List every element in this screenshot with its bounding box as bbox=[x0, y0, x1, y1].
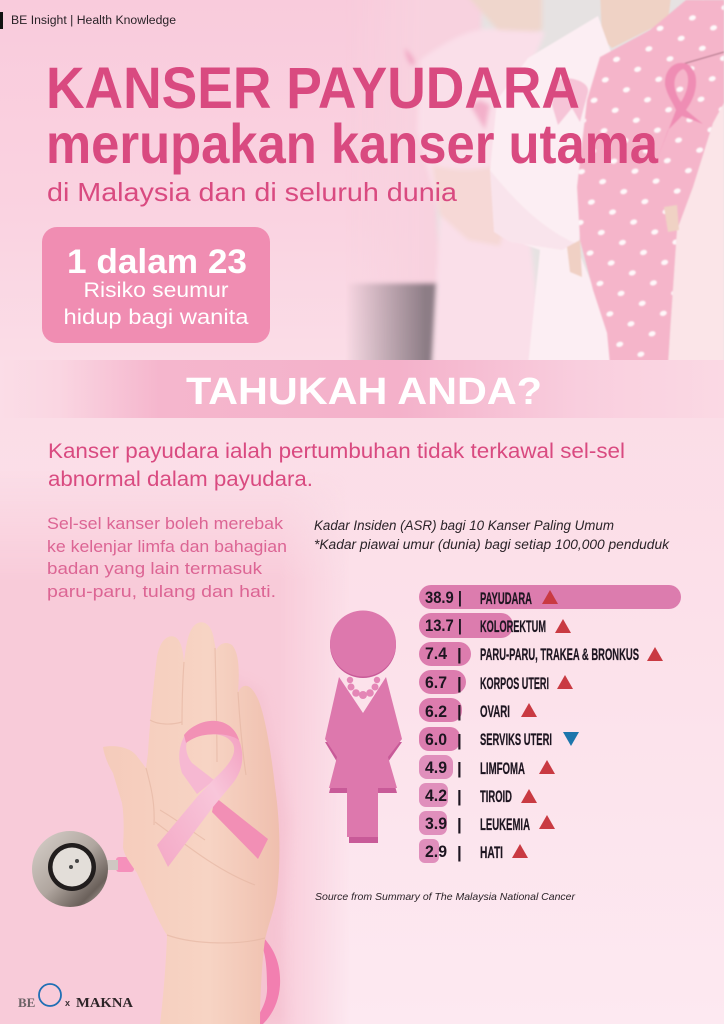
bar: Kolorektum 13.7: KOLOREKTUM bbox=[480, 617, 546, 636]
bar: Ovari 6.2: OVARI bbox=[480, 702, 510, 721]
bar: Paru-paru 7.4 bbox=[419, 642, 663, 666]
chart heading: *Kadar piawai umur (dunia) bagi setiap 100,000 penduduk bbox=[314, 537, 670, 552]
spread text: paru-paru, tulang dan hati. bbox=[47, 583, 276, 601]
woman 4 polka shirt bbox=[577, 0, 724, 365]
bar: Payudara 38.9: 38.9 | bbox=[425, 588, 462, 607]
chart heading: Kadar Insiden (ASR) bagi 10 Kanser Paling Umum bbox=[314, 518, 614, 533]
spread text: ke kelenjar limfa dan bahagian bbox=[47, 538, 287, 556]
bar: Korpos uteri 6.7: | bbox=[457, 674, 462, 693]
chart: incidence bars bbox=[419, 585, 681, 863]
bar: Payudara 38.9 bbox=[419, 585, 681, 609]
spread text bbox=[47, 515, 287, 601]
bar: Hati 2.9: HATI bbox=[480, 843, 503, 862]
photo: hand with ribbon and stethoscope bbox=[0, 514, 330, 1024]
spread text: Sel-sel kanser boleh merebak bbox=[47, 515, 284, 533]
bar: Leukemia 3.9: LEUKEMIA bbox=[480, 815, 530, 834]
bar: Leukemia 3.9 bbox=[419, 811, 555, 835]
stethoscope head bbox=[32, 831, 134, 907]
bar: Tiroid 4.2: TIROID bbox=[480, 787, 512, 806]
bar: Limfoma 4.9: 4.9 bbox=[425, 758, 447, 777]
callout: 1 in 23: 1 dalam 23 bbox=[67, 243, 247, 281]
necklace bbox=[347, 677, 380, 699]
callout: 1 in 23: Risiko seumur bbox=[84, 279, 228, 302]
bar: Limfoma 4.9: | bbox=[457, 759, 462, 778]
bar: Leukemia 3.9: 3.9 bbox=[425, 814, 447, 833]
header tag: BE Insight | Health Knowledge bbox=[11, 15, 176, 27]
woman 3 bbox=[600, 0, 672, 48]
logos: BE x MAKNA bbox=[18, 984, 134, 1011]
banner: Tahukah Anda bbox=[0, 360, 724, 418]
ribbon bbox=[157, 721, 268, 867]
bar: Korpos uteri 6.7 bbox=[419, 670, 573, 694]
chart heading bbox=[314, 518, 670, 552]
woman 2 bbox=[471, 0, 542, 32]
bar: Payudara 38.9: PAYUDARA bbox=[480, 589, 532, 608]
logos: BE x MAKNA: MAKNA bbox=[76, 996, 134, 1011]
bar: Hati 2.9 bbox=[419, 839, 528, 863]
bar: Tiroid 4.2 bbox=[419, 783, 537, 807]
bar: Serviks uteri 6.0 bbox=[419, 727, 579, 751]
photo: women with pink ribbons bbox=[330, 0, 724, 365]
woman 1 bbox=[378, 0, 482, 286]
header tag bbox=[0, 12, 176, 29]
definition text bbox=[48, 440, 625, 491]
logos: BE x MAKNA: BE bbox=[18, 995, 35, 1010]
definition text: abnormal dalam payudara. bbox=[48, 468, 313, 491]
bar: Paru-paru 7.4: 7.4 bbox=[425, 644, 447, 663]
stethoscope tube bbox=[260, 940, 280, 1024]
bar: Korpos uteri 6.7: 6.7 bbox=[425, 673, 447, 692]
bar: Tiroid 4.2: | bbox=[457, 787, 462, 806]
hand shadow bbox=[200, 660, 290, 1024]
bar: Serviks uteri 6.0: 6.0 bbox=[425, 730, 447, 749]
bar: Tiroid 4.2: 4.2 bbox=[425, 786, 447, 805]
logos: BE x MAKNA: x bbox=[65, 998, 70, 1008]
title: di Malaysia dan di seluruh dunia bbox=[47, 177, 458, 207]
source note: Source from Summary of The Malaysia National Cancer bbox=[315, 891, 576, 903]
spread text: badan yang lain termasuk bbox=[47, 560, 263, 578]
bar: Ovari 6.2: | bbox=[457, 702, 462, 721]
title: merupakan kanser utama bbox=[46, 112, 659, 175]
bar: Korpos uteri 6.7: KORPOS UTERI bbox=[480, 674, 549, 693]
bar: Limfoma 4.9 bbox=[419, 755, 555, 779]
bar: Kolorektum 13.7 bbox=[419, 613, 571, 638]
bar: Serviks uteri 6.0: SERVIKS UTERI bbox=[480, 730, 552, 749]
bar: Hati 2.9: 2.9 bbox=[425, 842, 447, 861]
callout: 1 in 23: hidup bagi wanita bbox=[64, 306, 249, 329]
banner: Tahukah Anda: TAHUKAH ANDA? bbox=[186, 371, 542, 413]
bar: Leukemia 3.9: | bbox=[457, 815, 462, 834]
icon: woman figure bbox=[325, 610, 402, 843]
title bbox=[46, 56, 659, 207]
title: KANSER PAYUDARA bbox=[46, 56, 580, 121]
bar: Paru-paru 7.4: | bbox=[457, 645, 462, 664]
callout: 1 in 23 bbox=[42, 227, 270, 343]
ribbon on shirt bbox=[664, 62, 702, 128]
bar: Serviks uteri 6.0: | bbox=[457, 731, 462, 750]
bar: Ovari 6.2 bbox=[419, 698, 537, 722]
bar: Ovari 6.2: 6.2 bbox=[425, 702, 447, 721]
woman 5 bbox=[668, 100, 724, 365]
bar: Kolorektum 13.7: 13.7 | bbox=[425, 616, 462, 635]
hand bbox=[103, 622, 279, 1024]
bar: Limfoma 4.9: LIMFOMA bbox=[480, 759, 525, 778]
definition text: Kanser payudara ialah pertumbuhan tidak terkawal sel-sel bbox=[48, 440, 625, 463]
bar: Hati 2.9: | bbox=[457, 843, 462, 862]
